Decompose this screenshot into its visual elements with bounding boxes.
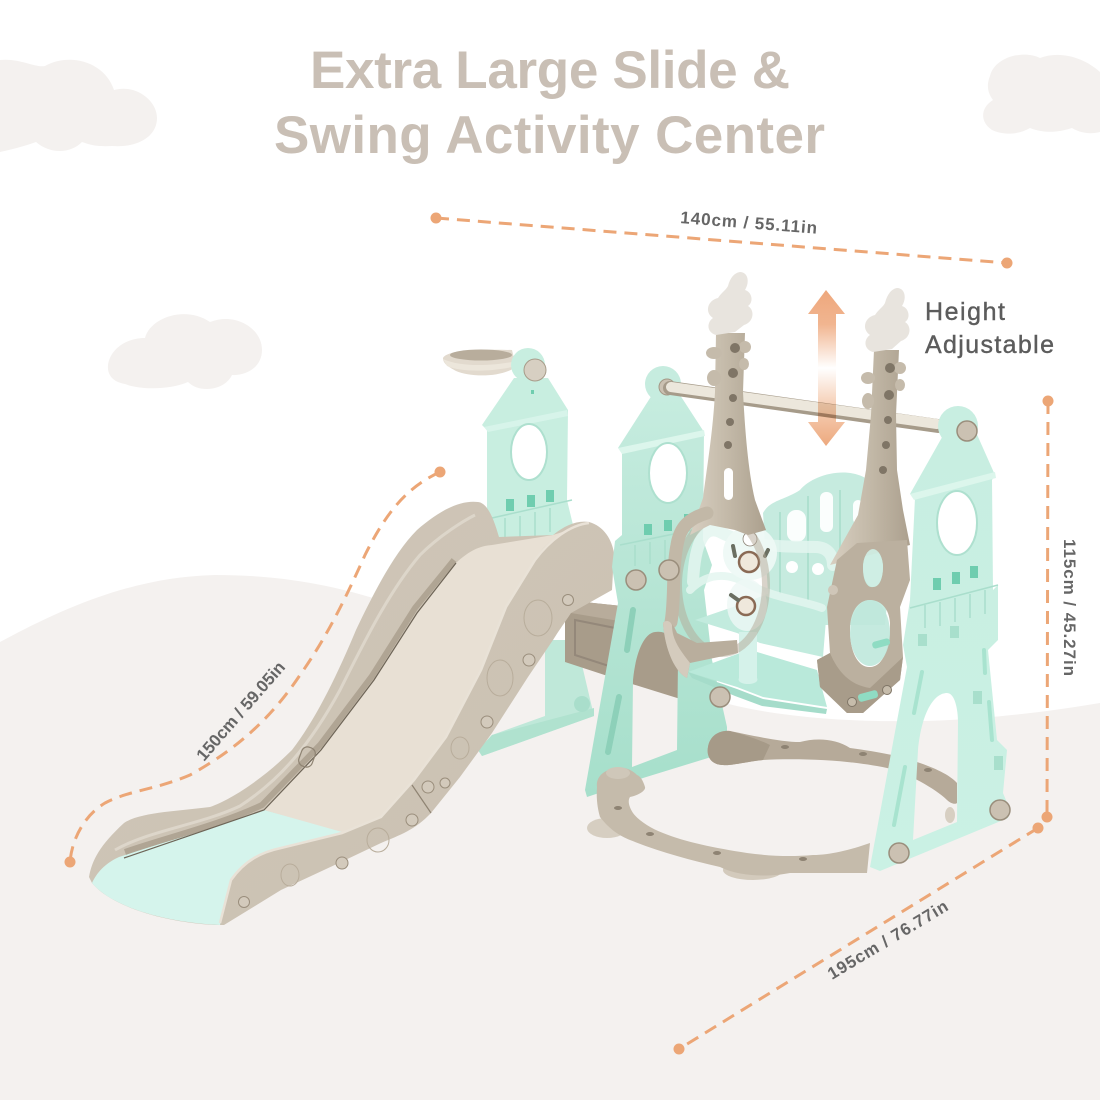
right finial [865, 288, 910, 352]
right swing tower [870, 430, 1010, 871]
left hanger holes [724, 343, 740, 449]
ring feet [587, 818, 627, 838]
left finial [708, 272, 753, 335]
swing top bar [670, 387, 938, 426]
height adjustable label: Height [925, 298, 1005, 326]
upper tray [695, 592, 827, 657]
swing seat [688, 592, 827, 714]
rail embossed motifs [281, 600, 552, 886]
left frame bottom [663, 621, 738, 678]
rail screws [238, 594, 574, 908]
right hanger strap [830, 350, 910, 565]
swing safety bar [690, 530, 833, 608]
storage box under slide [565, 600, 690, 702]
swing backrest [763, 473, 888, 625]
seat post [739, 632, 757, 684]
rail seam [412, 785, 431, 813]
left hanger scallops [706, 341, 751, 386]
height adjustable label: Adjustable [925, 331, 1054, 359]
base ring [587, 731, 957, 880]
dimension: height 115cm [1042, 396, 1079, 822]
bolts [626, 421, 1010, 863]
slide mint end [92, 810, 342, 925]
height adjustable label [925, 298, 1054, 359]
height adjustable arrow [808, 290, 845, 446]
right hanger holes [879, 363, 895, 474]
basketball hoop [443, 350, 516, 375]
title [274, 41, 825, 165]
penguin bubble [723, 526, 777, 631]
right frame windows [850, 600, 890, 666]
slide body [89, 502, 614, 925]
dimension: depth 195cm [674, 822, 1044, 1054]
title: Swing Activity Center [274, 106, 825, 165]
left rail groove [125, 560, 454, 852]
right hanger scallops [861, 362, 906, 409]
left tower details [608, 366, 705, 752]
dimension: height 115cm: 115cm / 45.27in [1060, 539, 1079, 676]
cloud: top right [983, 55, 1100, 134]
left swing tower [585, 395, 727, 797]
ring front arc [597, 768, 870, 875]
dimension: width 140cm: 140cm / 55.11in [680, 208, 818, 238]
cloud: middle [108, 314, 262, 389]
right rail edge highlight [220, 523, 589, 923]
dimension: width 140cm [430, 208, 1012, 268]
background hill [0, 575, 1100, 1100]
dimension: depth 195cm: 195cm / 76.77in [824, 897, 951, 983]
left rail highlight [115, 515, 475, 850]
cloud: top left [0, 60, 157, 152]
ring holes [614, 745, 932, 861]
right frame body [817, 540, 910, 713]
dimension: slide length 150cm: 150cm / 59.05in [193, 658, 289, 765]
ring back arc [708, 731, 957, 804]
left frame side [671, 513, 707, 622]
left hanger strap [690, 333, 766, 535]
left hanger [663, 272, 766, 678]
slide support frame [478, 640, 594, 756]
right frame bottom [817, 653, 903, 713]
playset product illustration [89, 272, 1010, 925]
right tower details [894, 406, 1003, 825]
slide [89, 502, 614, 925]
title: Extra Large Slide & [310, 41, 790, 100]
dimension: slide length 150cm [64, 466, 446, 868]
rear tower [482, 348, 575, 545]
right hanger [817, 288, 910, 713]
left hanger ring [678, 517, 766, 653]
lower plate [688, 652, 827, 707]
slide bed [264, 522, 589, 833]
